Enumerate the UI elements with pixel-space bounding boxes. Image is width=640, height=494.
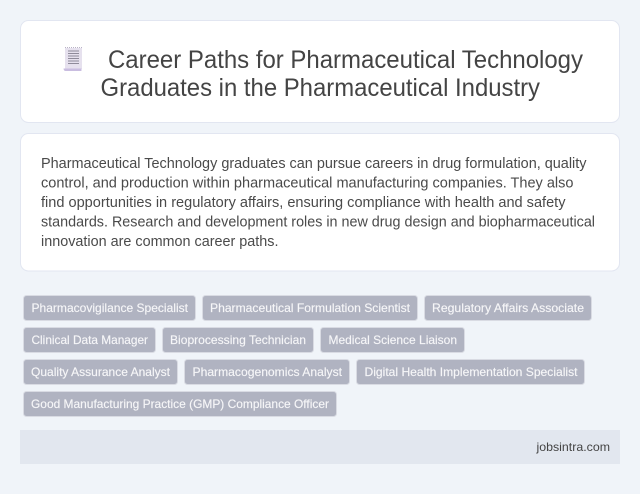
tag: Bioprocessing Technician: Bioprocessing Technician <box>170 333 306 347</box>
tag: Pharmacovigilance Specialist: Pharmacovigilance Specialist <box>32 301 189 315</box>
text block: description: control, and production within pharmaceutical manufacturing companies. They also <box>41 176 574 192</box>
tag: Regulatory Affairs Associate: Regulatory Affairs Associate <box>432 301 584 315</box>
footer bar <box>20 430 620 464</box>
tag: Clinical Data Manager <box>24 328 156 352</box>
panel: title card <box>20 20 620 122</box>
title: Career Paths for Pharmaceutical Technology <box>108 46 583 74</box>
tag list: career paths <box>24 296 592 416</box>
title: Graduates in the Pharmaceutical Industry <box>100 74 540 102</box>
footer source text: jobsintra.com <box>535 440 610 454</box>
text block: description <box>41 156 595 250</box>
tag: Clinical Data Manager: Clinical Data Manager <box>32 333 148 347</box>
tag: Pharmacovigilance Specialist <box>24 296 196 320</box>
tag: Quality Assurance Analyst: Quality Assurance Analyst <box>31 365 171 379</box>
text block: description: Pharmaceutical Technology graduates can pursue careers in drug formulation, quality <box>41 156 587 172</box>
tag: Pharmaceutical Formulation Scientist <box>202 296 418 320</box>
tag: Pharmaceutical Formulation Scientist: Pharmaceutical Formulation Scientist <box>210 301 411 315</box>
tag: Good Manufacturing Practice (GMP) Compliance Officer: Good Manufacturing Practice (GMP) Compliance Officer <box>31 397 329 411</box>
tag: Digital Health Implementation Specialist <box>356 360 584 384</box>
text block: description: standards. Research and development roles in new drug design and biopharmaceutical <box>41 214 595 230</box>
tag: Good Manufacturing Practice (GMP) Compliance Officer <box>24 392 336 416</box>
tag: Pharmacogenomics Analyst: Pharmacogenomics Analyst <box>192 365 343 379</box>
tag: Quality Assurance Analyst <box>24 360 178 384</box>
tag: Digital Health Implementation Specialist: Digital Health Implementation Specialist <box>364 365 578 379</box>
icon: document scroll <box>64 48 82 71</box>
text block: description: find opportunities in regulatory affairs, ensuring compliance with health and safety <box>41 195 566 211</box>
tag: Pharmacogenomics Analyst <box>184 360 350 384</box>
title <box>100 46 583 102</box>
tag: Medical Science Liaison: Medical Science Liaison <box>328 333 457 347</box>
panel: description <box>20 134 620 271</box>
tag: Bioprocessing Technician <box>162 328 314 352</box>
tag: Medical Science Liaison <box>320 328 464 352</box>
text block: description: innovation are common career paths. <box>41 234 278 250</box>
tag: Regulatory Affairs Associate <box>424 296 592 320</box>
